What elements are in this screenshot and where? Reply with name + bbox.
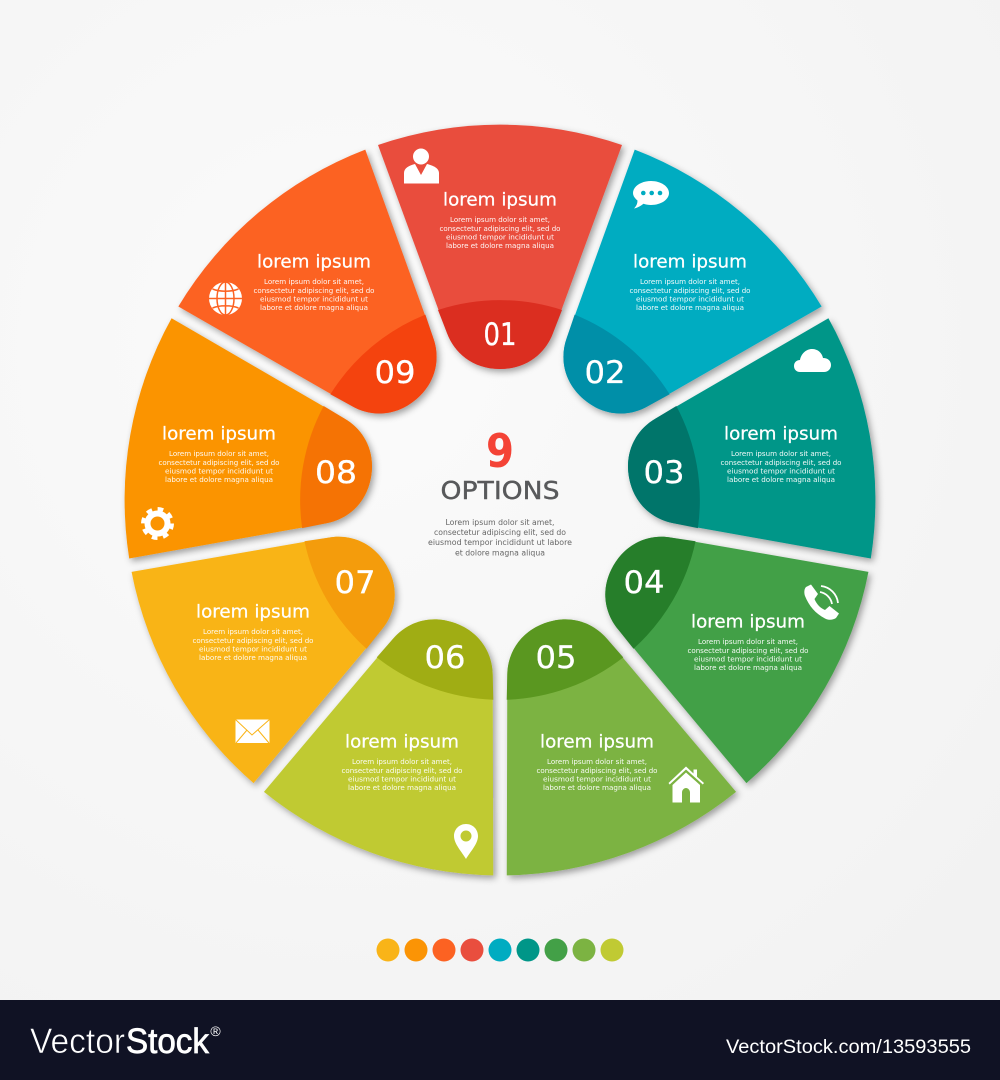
segment 04 heading: lorem ipsum — [691, 612, 805, 632]
icon: gear — [143, 509, 172, 538]
segment 03 body text: Lorem ipsum dolor sit amet, — [731, 450, 831, 458]
segment 08 body text: eiusmod tempor incididunt ut — [165, 468, 273, 476]
segment 09 body text: eiusmod tempor incididunt ut — [260, 296, 368, 304]
segment 09 shape — [165, 134, 509, 478]
segment 07 body text: labore et dolore magna aliqua — [199, 654, 307, 662]
segment 02 shape — [491, 134, 835, 478]
center body text: Lorem ipsum dolor sit amet, — [446, 518, 554, 527]
icon: cloud — [794, 349, 831, 372]
segment 07 body text: eiusmod tempor incididunt ut — [199, 646, 307, 654]
panel: segment 04 — [552, 460, 886, 793]
segment 03 inner tab — [618, 404, 708, 538]
segment 08 body text: labore et dolore magna aliqua — [165, 476, 273, 484]
segment 07 body text: consectetur adipiscing elit, sed do — [192, 637, 314, 645]
segment 05 body text: labore et dolore magna aliqua — [543, 784, 651, 792]
footer bar — [0, 1000, 1000, 1080]
segment 01 body text: Lorem ipsum dolor sit amet, — [450, 216, 550, 224]
icon: phone — [804, 584, 839, 620]
segment 03 body text: consectetur adipiscing elit, sed do — [720, 459, 842, 467]
segment 09 body text: labore et dolore magna aliqua — [260, 304, 368, 312]
panel: segment 02 — [491, 134, 835, 478]
center body text — [428, 518, 572, 558]
panel: segment 03 — [608, 315, 891, 597]
segment 04 body text — [688, 638, 808, 672]
segment 04 shape — [552, 460, 886, 793]
segment 08 body text — [158, 450, 280, 484]
segment 05 body text: Lorem ipsum dolor sit amet, — [547, 758, 647, 766]
segment 07 body text — [192, 628, 314, 662]
footer logo — [30, 1022, 221, 1061]
legend dots — [376, 938, 624, 962]
segment 05 body text — [536, 758, 658, 792]
segment 02 body text: Lorem ipsum dolor sit amet, — [640, 278, 740, 286]
segment 07 heading: lorem ipsum — [196, 602, 310, 622]
segment 08 body text: Lorem ipsum dolor sit amet, — [169, 450, 269, 458]
segment 04 body text: Lorem ipsum dolor sit amet, — [698, 638, 798, 646]
icon: speech bubble — [633, 181, 669, 208]
segment 03 body text: labore et dolore magna aliqua — [727, 476, 835, 484]
segment 07 body text: Lorem ipsum dolor sit amet, — [203, 628, 303, 636]
segment 02 body text: labore et dolore magna aliqua — [636, 304, 744, 312]
icon: map pin — [454, 824, 478, 859]
segment 08 shape — [109, 315, 392, 597]
segment 04 body text: consectetur adipiscing elit, sed do — [688, 647, 808, 655]
center body text: et dolore magna aliqua — [455, 548, 545, 558]
segment 07 number: 07 — [334, 565, 376, 601]
segment 05 body text: eiusmod tempor incididunt ut — [543, 776, 651, 784]
segment 06 body text: Lorem ipsum dolor sit amet, — [352, 758, 452, 766]
center body text: eiusmod tempor incididunt ut labore — [428, 538, 572, 547]
segment 09 body text: consectetur adipiscing elit, sed do — [254, 287, 374, 295]
segment 08 body text: consectetur adipiscing elit, sed do — [158, 459, 280, 467]
segment 02 body text — [630, 278, 750, 312]
segment 02 body text: consectetur adipiscing elit, sed do — [630, 287, 750, 295]
footer URL: VectorStock.com/13593555 — [726, 1036, 971, 1058]
segment 06 number: 06 — [424, 640, 466, 676]
segment 06 body text: labore et dolore magna aliqua — [348, 784, 456, 792]
center heading OPTIONS: OPTIONS — [440, 476, 560, 505]
segment 09 body text — [254, 278, 374, 312]
segment 05 body text: consectetur adipiscing elit, sed do — [536, 767, 658, 775]
segment 06 body text: consectetur adipiscing elit, sed do — [342, 767, 462, 775]
center body text: consectetur adipiscing elit, sed do — [434, 528, 566, 537]
segment 01 body text: labore et dolore magna aliqua — [446, 242, 554, 250]
segment 03 body text — [720, 450, 842, 484]
segment 01 body text: consectetur adipiscing elit, sed do — [440, 225, 560, 233]
segment 03 heading: lorem ipsum — [724, 424, 838, 444]
center number 9: 9 — [486, 424, 514, 478]
segment 07 inner tab — [296, 512, 418, 654]
segment 01 inner tab — [438, 300, 562, 369]
footer logo: ® — [210, 1023, 221, 1039]
segment 03 number: 03 — [644, 455, 684, 491]
segment 04 body text: labore et dolore magna aliqua — [694, 664, 802, 672]
panel: segment 01 — [378, 125, 622, 369]
segment 05 inner tab — [487, 602, 627, 709]
segment 09 heading: lorem ipsum — [257, 252, 371, 272]
segment 06 shape — [257, 581, 570, 894]
segment 09 body text: Lorem ipsum dolor sit amet, — [264, 278, 364, 286]
segment 03 shape — [608, 315, 891, 597]
icon: envelope — [236, 720, 270, 743]
segment 03 body text: eiusmod tempor incididunt ut — [727, 468, 835, 476]
segment 06 heading: lorem ipsum — [345, 732, 459, 752]
panel: segment 05 — [430, 581, 743, 894]
segment 06 body text: eiusmod tempor incididunt ut — [348, 776, 456, 784]
segment 04 body text: eiusmod tempor incididunt ut — [694, 656, 802, 664]
segment 04 number: 04 — [624, 565, 664, 601]
segment 06 body text — [342, 758, 462, 792]
footer logo: Stock — [126, 1022, 209, 1061]
center title block — [428, 424, 572, 558]
icon: house — [668, 766, 704, 802]
segment 07 shape — [114, 460, 448, 793]
panel: segment 08 — [109, 315, 392, 597]
icon: globe — [209, 282, 242, 315]
segment 02 body text: eiusmod tempor incididunt ut — [636, 296, 744, 304]
segment 02 heading: lorem ipsum — [633, 252, 747, 272]
segment 08 number: 08 — [315, 455, 357, 491]
segment 01 shape — [378, 125, 622, 369]
segment 08 inner tab — [292, 404, 382, 538]
segment 01 heading: lorem ipsum — [443, 190, 557, 210]
segment 06 inner tab — [373, 602, 513, 709]
panel: segment 06 — [257, 581, 570, 894]
segment 01 body text: eiusmod tempor incididunt ut — [446, 234, 554, 242]
segment 05 heading: lorem ipsum — [540, 732, 654, 752]
panel: segment 07 — [114, 460, 448, 793]
segment 08 heading: lorem ipsum — [162, 424, 276, 444]
segment 02 number: 02 — [584, 355, 626, 391]
segment 02 inner tab — [537, 307, 676, 440]
segment 05 shape — [430, 581, 743, 894]
panel: segment 09 — [165, 134, 509, 478]
segment 01 number: 01 — [484, 317, 516, 353]
segment 01 body text — [440, 216, 560, 250]
segment 09 inner tab — [324, 307, 463, 440]
footer logo: Vector — [30, 1022, 125, 1061]
segment 09 number: 09 — [374, 355, 416, 391]
icon: person — [404, 148, 439, 184]
segment 05 number: 05 — [536, 640, 576, 676]
segment 04 inner tab — [582, 512, 704, 654]
